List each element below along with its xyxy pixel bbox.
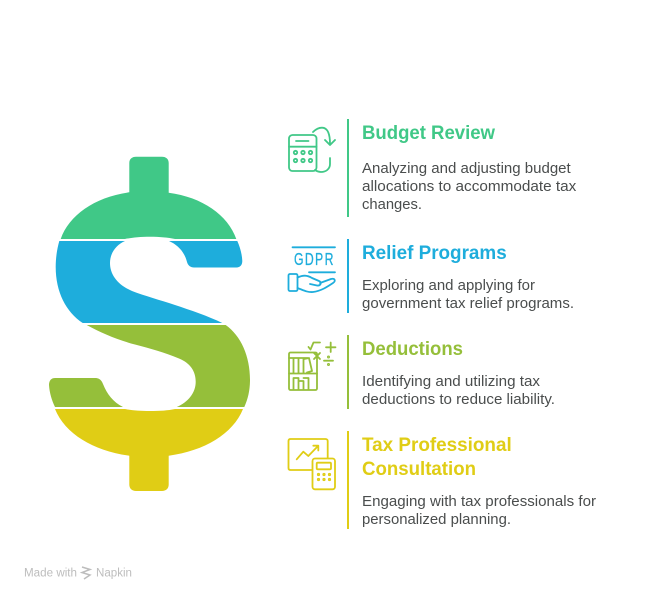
description xyxy=(362,161,577,213)
heading: Relief Programs xyxy=(362,243,507,264)
panel: deductions xyxy=(289,335,555,409)
footer: made with Napkin: Made with xyxy=(24,568,77,580)
divider bar xyxy=(347,335,349,409)
icon: dollar sign xyxy=(49,157,250,491)
description: personalized planning. xyxy=(362,512,511,528)
dollar segment: yellow bottom xyxy=(55,409,243,491)
panel: relief programs xyxy=(288,239,574,313)
description xyxy=(362,494,596,528)
icon: GDPR hand xyxy=(288,247,335,292)
heading: Deductions xyxy=(362,339,463,360)
description: government tax relief programs. xyxy=(362,296,574,312)
heading: Tax Professional xyxy=(362,435,512,456)
description: changes. xyxy=(362,197,422,213)
description: allocations to accommodate tax xyxy=(362,179,577,195)
dollar segment: blue xyxy=(56,241,242,323)
footer: made with Napkin: Napkin xyxy=(96,568,132,580)
description: Engaging with tax professionals for xyxy=(362,494,596,510)
icon: shelf with maths symbols xyxy=(289,342,336,390)
divider bar xyxy=(347,431,349,529)
icon: chart with calculator xyxy=(288,439,335,489)
icon: Napkin logo xyxy=(82,567,90,579)
heading xyxy=(362,435,512,480)
footer: made with Napkin xyxy=(24,567,132,580)
dollar segment: green top xyxy=(61,157,236,239)
icon: calculator with arrows xyxy=(289,128,335,172)
description xyxy=(362,278,574,312)
description: Analyzing and adjusting budget xyxy=(362,161,571,177)
divider bar xyxy=(347,119,349,217)
heading: Consultation xyxy=(362,459,476,480)
description: deductions to reduce liability. xyxy=(362,392,555,408)
panel: tax professional consultation xyxy=(288,431,596,529)
description: Identifying and utilizing tax xyxy=(362,374,541,390)
description: Exploring and applying for xyxy=(362,278,535,294)
panel: budget review xyxy=(289,119,577,217)
dollar segment: olive xyxy=(49,325,250,407)
heading: Budget Review xyxy=(362,123,495,144)
divider bar xyxy=(347,239,349,313)
description xyxy=(362,374,555,408)
icon: GDPR hand: GDPR xyxy=(294,250,335,270)
